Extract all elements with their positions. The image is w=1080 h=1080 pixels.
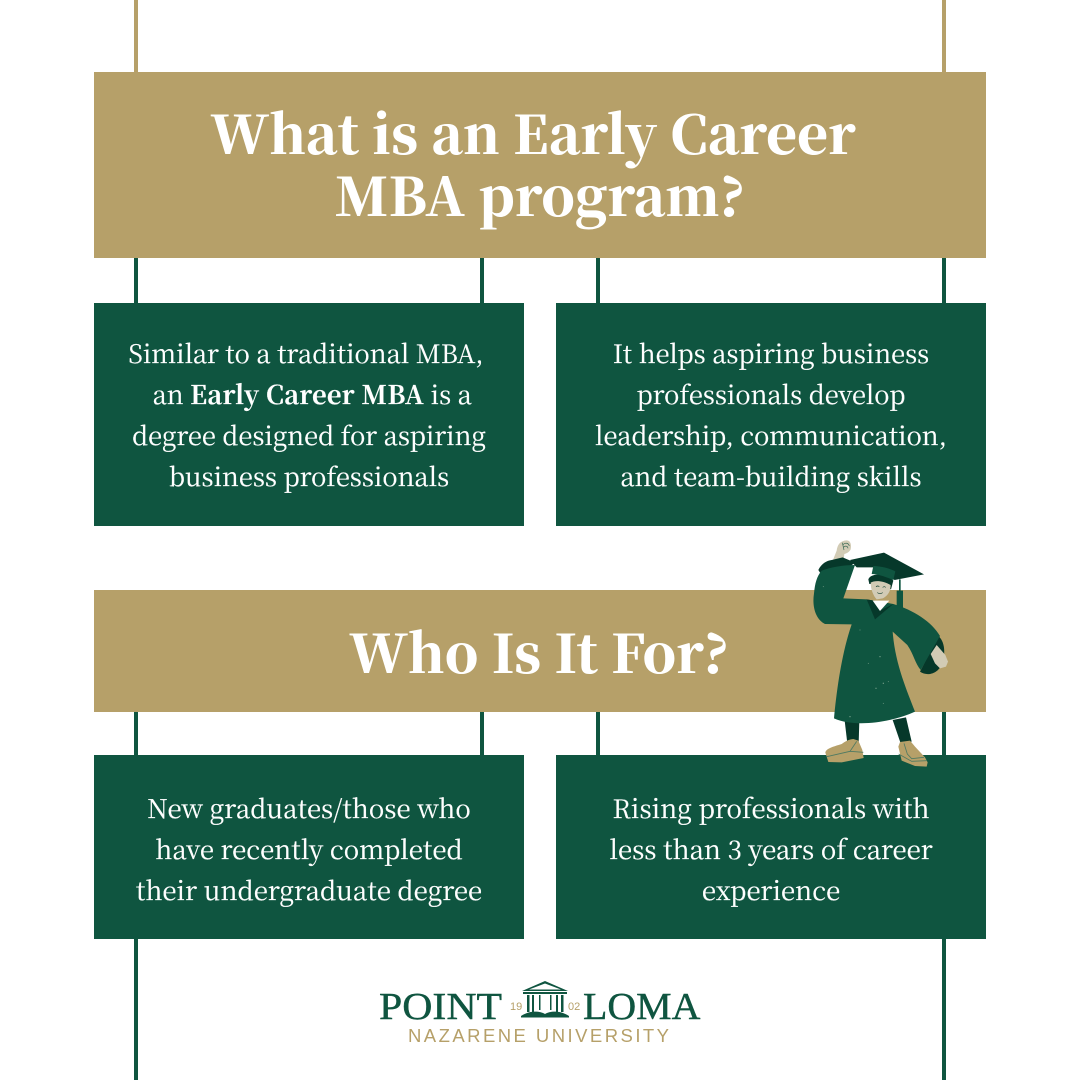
logo word POINT: POINT [379, 986, 502, 1028]
face details [876, 586, 886, 594]
connector lines section 2 [134, 712, 946, 755]
text: definition: degree designed for aspiring [132, 417, 486, 453]
top connector right [942, 0, 946, 72]
heading panel: Who Is It For [94, 590, 986, 712]
logo: Point Loma Nazarene University [379, 981, 700, 1046]
heading panel: What is an Early Career MBA program [94, 72, 986, 258]
fist lines [842, 543, 849, 550]
text: rising professionals: experience [702, 871, 840, 908]
panel: skills [556, 303, 986, 526]
shoe lines [827, 741, 927, 761]
back sleeve [818, 557, 855, 573]
logo year 19: 19 [510, 1001, 522, 1013]
panel: rising professionals [556, 755, 986, 939]
shoes [825, 739, 928, 767]
raised arm skin [829, 540, 851, 570]
text: rising professionals: less than 3 years of career [609, 830, 933, 867]
speckles [823, 586, 889, 717]
heading: What is an Early Career MBA program: MBA program? [335, 156, 745, 232]
text: new graduates [136, 789, 482, 908]
heading: What is an Early Career MBA program: What is an Early Career [210, 94, 856, 170]
bottom connector left [134, 939, 138, 1080]
text: skills: and team-building skills [620, 458, 922, 494]
face [871, 581, 891, 599]
icon: graduate illustration [813, 540, 948, 767]
legs [845, 717, 912, 743]
text: skills: professionals develop [636, 376, 906, 412]
gown [813, 565, 940, 723]
text: new graduates: have recently completed [155, 830, 463, 867]
text: new graduates: their undergraduate degree [136, 871, 482, 908]
bottom connector right [942, 939, 946, 1080]
panel: definition [94, 303, 524, 526]
text: rising professionals [609, 789, 933, 908]
text: rising professionals: Rising professionals with [612, 789, 930, 826]
logo year 02: 02 [568, 1001, 580, 1013]
text: definition: business professionals [169, 458, 449, 494]
text: skills: leadership, communication, [595, 417, 947, 453]
panel: new graduates [94, 755, 524, 939]
logo subtitle: NAZARENE UNIVERSITY [408, 1025, 671, 1046]
sleeve interior [920, 636, 944, 674]
text: definition [128, 335, 486, 494]
collar [867, 599, 893, 619]
shirt [873, 601, 889, 611]
right hand [931, 645, 948, 668]
logo word LOMA: LOMA [583, 986, 700, 1028]
heading: What is an Early Career MBA program [210, 94, 856, 232]
tassel [897, 579, 903, 608]
text: new graduates: New graduates/those who [147, 789, 471, 826]
text: skills [595, 335, 947, 494]
text: definition: Similar to a traditional MBA, [128, 335, 484, 371]
top connector left [134, 0, 138, 72]
heading: Who Is It For: Who Is It For? [349, 613, 729, 689]
logo building icon [521, 981, 569, 1018]
cap [850, 553, 924, 580]
hair [868, 574, 893, 589]
text: skills: It helps aspiring business [613, 335, 929, 371]
connector lines section 1 [134, 258, 946, 303]
text: definition: an Early Career MBA is a [153, 376, 472, 412]
cap band [872, 566, 895, 580]
